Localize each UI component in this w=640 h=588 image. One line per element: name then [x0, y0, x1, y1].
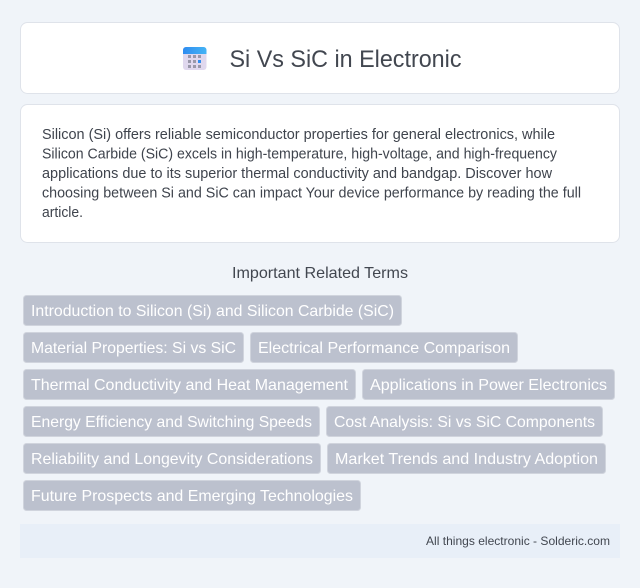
panel: intro text: applications due to its superior thermal conductivity and bandgap. Discover how [42, 166, 553, 182]
tag: Cost Analysis: Si vs SiC Components [334, 414, 595, 431]
tag [24, 406, 320, 436]
title: Si Vs SiC in Electronic [230, 46, 462, 73]
tag [328, 444, 606, 474]
tag: Electrical Performance Comparison [258, 340, 510, 357]
tag [24, 480, 360, 510]
panel: intro text: choosing between Si and SiC can impact Your device performance by reading the full [42, 186, 581, 202]
tag [24, 444, 320, 474]
footer [20, 524, 620, 558]
panel: intro text: Silicon (Si) offers reliable semiconductor properties for general electronics, while [42, 127, 555, 143]
tag: Introduction to Silicon (Si) and Silicon Carbide (SiC) [31, 303, 394, 320]
tag [24, 332, 244, 362]
tag: Market Trends and Industry Adoption [335, 451, 598, 468]
tag: Thermal Conductivity and Heat Management [31, 377, 349, 394]
icon: calendar [183, 47, 206, 70]
tag [250, 332, 518, 362]
panel: intro text: article. [42, 205, 83, 221]
tag: Reliability and Longevity Considerations [31, 451, 313, 468]
heading: related terms: Important Related Terms [232, 265, 408, 282]
tag [326, 406, 602, 436]
footer: All things electronic - Solderic.com [426, 534, 610, 548]
tag list [24, 296, 614, 510]
panel: intro text [20, 104, 620, 242]
tag [362, 370, 614, 400]
tag [24, 296, 402, 326]
tag: Applications in Power Electronics [370, 377, 607, 394]
tag: Future Prospects and Emerging Technologies [31, 488, 353, 505]
panel: intro text: Silicon Carbide (SiC) excels in high-temperature, high-voltage, and high-frequency [42, 146, 558, 162]
panel: header [20, 22, 620, 94]
tag: Material Properties: Si vs SiC [31, 340, 236, 357]
tag: Energy Efficiency and Switching Speeds [31, 414, 312, 431]
tag [24, 370, 356, 400]
